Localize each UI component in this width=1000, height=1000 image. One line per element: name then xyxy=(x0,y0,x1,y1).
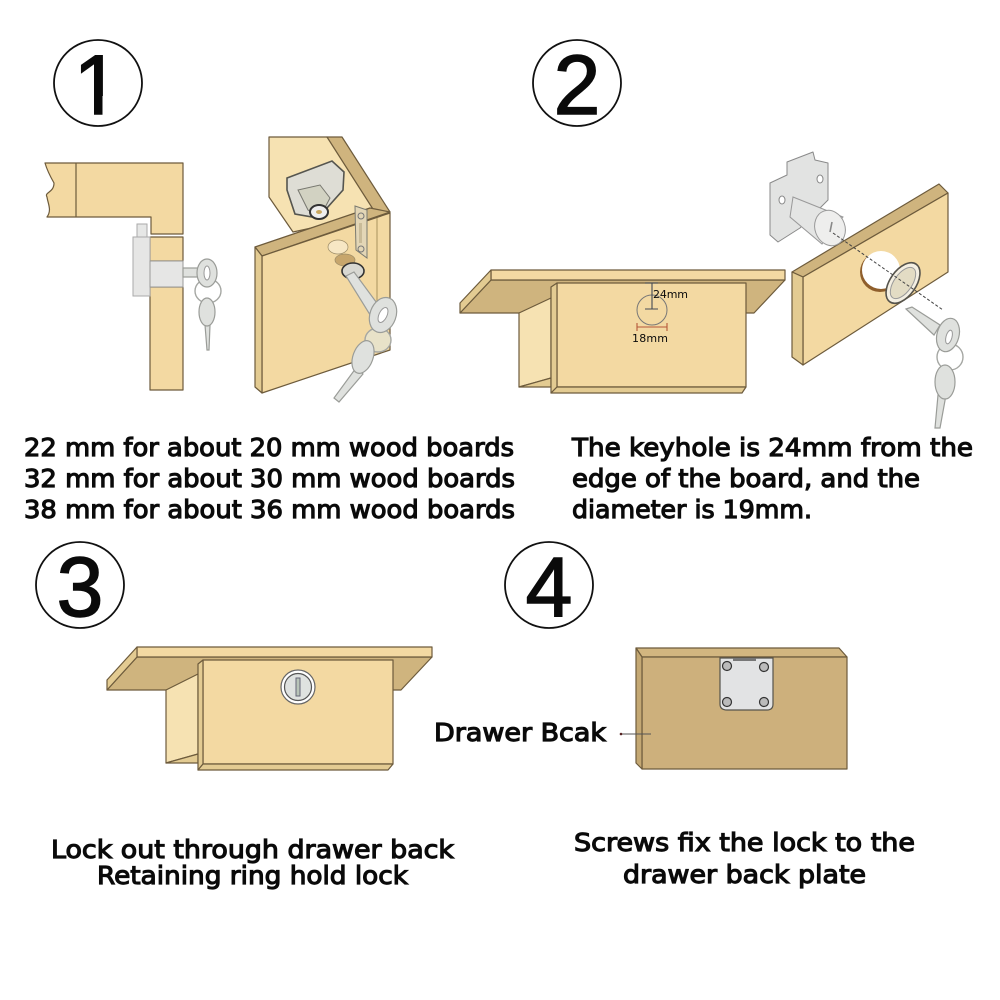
lock body side view xyxy=(133,224,183,296)
back face xyxy=(642,657,847,769)
caption step 1: 22 mm for about 20 mm wood boards xyxy=(24,433,514,462)
number badge 2: 2 xyxy=(554,38,600,132)
caption step 4: Screws fix the lock to the xyxy=(574,828,915,857)
horizontal wood board xyxy=(45,163,183,234)
screws xyxy=(722,662,768,706)
drawer front bottom edge xyxy=(198,764,393,770)
caption step 2 xyxy=(571,433,973,524)
number badge 2 xyxy=(533,38,621,132)
shelf underside xyxy=(107,657,432,690)
diagram: drawer back with lock plate xyxy=(636,648,847,769)
top edge xyxy=(636,648,847,657)
number badge 1: 1 xyxy=(74,38,120,132)
caption step 1 xyxy=(24,433,515,524)
side inner triangle xyxy=(519,378,551,387)
keys exploded xyxy=(906,307,963,428)
side inner triangle xyxy=(166,754,198,763)
number badge 4 xyxy=(505,540,593,634)
keyhole circle xyxy=(637,295,667,325)
caption step 2: diameter is 19mm. xyxy=(572,495,812,524)
caption step 2: edge of the board, and the xyxy=(572,464,920,493)
18mm dimension xyxy=(632,323,668,345)
caption step 4: drawer back plate xyxy=(623,860,866,889)
cabinet top panel xyxy=(269,137,385,232)
left edge xyxy=(636,648,642,769)
diagram: open drawer with lock installed xyxy=(255,137,401,402)
caption step 4 xyxy=(574,828,915,889)
caption step 2: The keyhole is 24mm from the xyxy=(571,433,973,462)
drawer front left edge xyxy=(198,660,203,770)
drawer front face xyxy=(262,213,390,393)
board top edge xyxy=(792,184,948,277)
drawer front xyxy=(557,283,746,387)
drawer side xyxy=(166,674,198,763)
lock body inside view xyxy=(287,161,344,219)
number badge 3 xyxy=(36,540,124,634)
drawer front left edge xyxy=(551,283,557,393)
key side view xyxy=(183,259,221,350)
caption step 1: 38 mm for about 36 mm wood boards xyxy=(24,495,515,524)
label: drawer back with leader: Drawer Bcak xyxy=(434,718,607,747)
shelf left edge xyxy=(107,647,137,690)
caption step 3 xyxy=(51,835,455,890)
cabinet edge strip xyxy=(327,137,390,217)
lock cylinder xyxy=(790,197,850,250)
number badge 3: 3 xyxy=(57,540,103,634)
keys on drawer xyxy=(334,272,401,402)
drawer front bottom edge xyxy=(551,387,746,393)
shelf left edge xyxy=(460,270,491,313)
24mm dimension: 24mm xyxy=(653,288,688,301)
metal plate xyxy=(720,658,773,710)
drilled hole xyxy=(860,251,900,292)
shelf front edge xyxy=(491,270,785,280)
caption step 3: Retaining ring hold lock xyxy=(97,861,409,890)
number badge 4: 4 xyxy=(526,540,572,634)
shelf front edge xyxy=(137,647,432,657)
18mm dimension: 18mm xyxy=(632,332,668,345)
vertical wood board upper xyxy=(150,237,183,261)
retaining ring xyxy=(879,257,927,309)
caption step 3: Lock out through drawer back xyxy=(51,835,455,864)
diagram: exploded lock, board and key xyxy=(770,152,963,428)
diagram: drawer with keyhole dimensions xyxy=(460,270,785,393)
diagram: side section of drawer and lock xyxy=(45,163,221,390)
shelf underside xyxy=(460,280,785,313)
board left edge xyxy=(792,272,803,365)
24mm dimension xyxy=(645,283,688,309)
plate top bar xyxy=(733,658,756,661)
lock plate xyxy=(770,152,828,242)
board face xyxy=(803,193,948,365)
retaining ring xyxy=(342,263,364,279)
caption step 1: 32 mm for about 30 mm wood boards xyxy=(24,464,515,493)
number badge 1 xyxy=(54,38,142,132)
drawer top edge xyxy=(255,208,390,256)
drill holes xyxy=(328,240,355,266)
diagram: drawer with lock fitted xyxy=(107,647,432,770)
dashed axis xyxy=(833,233,943,310)
lock cylinder face xyxy=(281,670,315,704)
drawer front xyxy=(203,660,393,764)
drawer left edge xyxy=(255,247,262,393)
striker plate xyxy=(355,206,367,258)
drawer side xyxy=(519,298,551,387)
vertical wood board lower xyxy=(150,287,183,390)
